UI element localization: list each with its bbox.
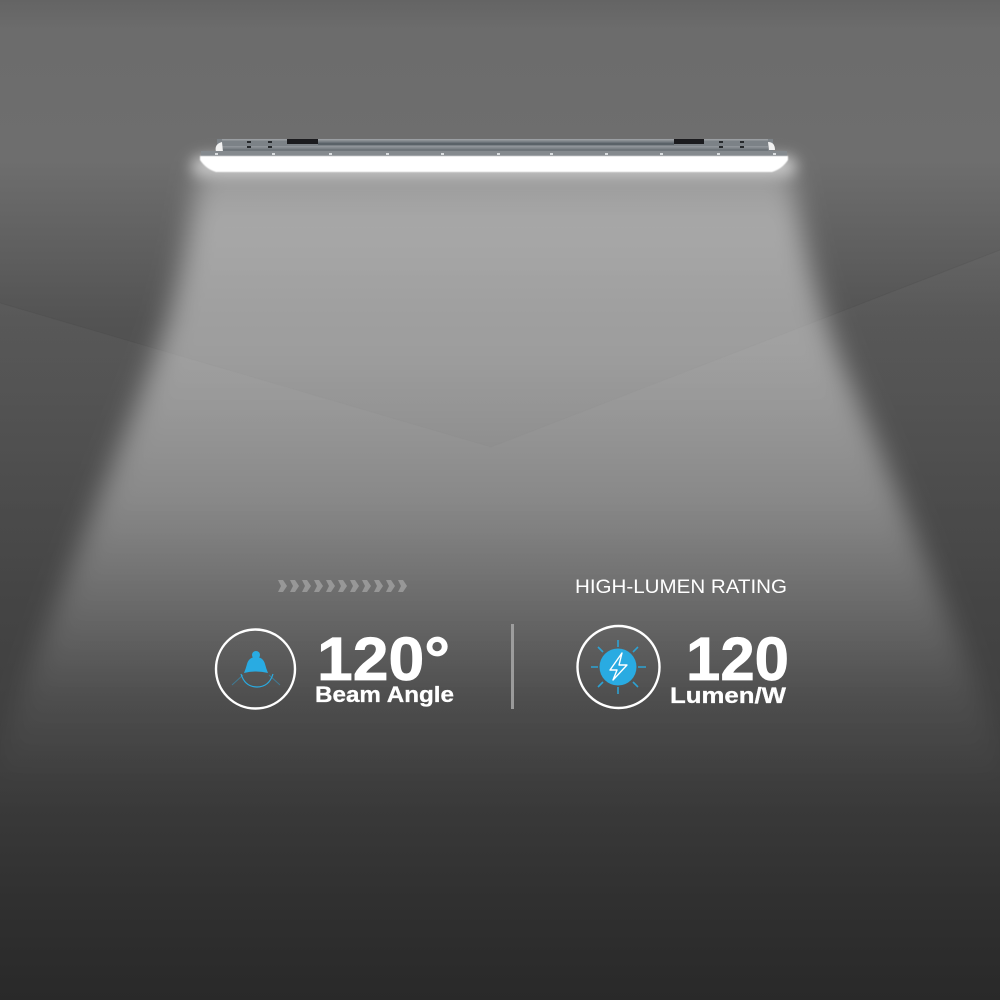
icon: sun bolt (578, 626, 660, 708)
lamp glow (192, 156, 796, 176)
flange rivets (215, 153, 776, 155)
divider (511, 624, 514, 709)
label: beam angle: Beam Angle (315, 682, 454, 707)
wall crease lines (0, 250, 1000, 600)
end caps (216, 142, 223, 152)
icon: beam angle lamp (216, 630, 295, 708)
lamp fixture (192, 139, 796, 176)
lamp upper housing (217, 139, 773, 153)
heading: high-lumen rating: HIGH-LUMEN RATING (575, 577, 787, 598)
right stat group (575, 577, 789, 708)
value: 120: 120 (686, 625, 789, 693)
label: lumen per watt: Lumen/W (670, 683, 786, 708)
light beam (0, 166, 1000, 800)
glowing diffuser (200, 156, 788, 172)
chevron row (278, 580, 407, 592)
lower flange (201, 151, 787, 156)
value: 120 degrees: 120° (317, 625, 450, 693)
left stat group (216, 580, 454, 708)
latches (287, 139, 318, 144)
